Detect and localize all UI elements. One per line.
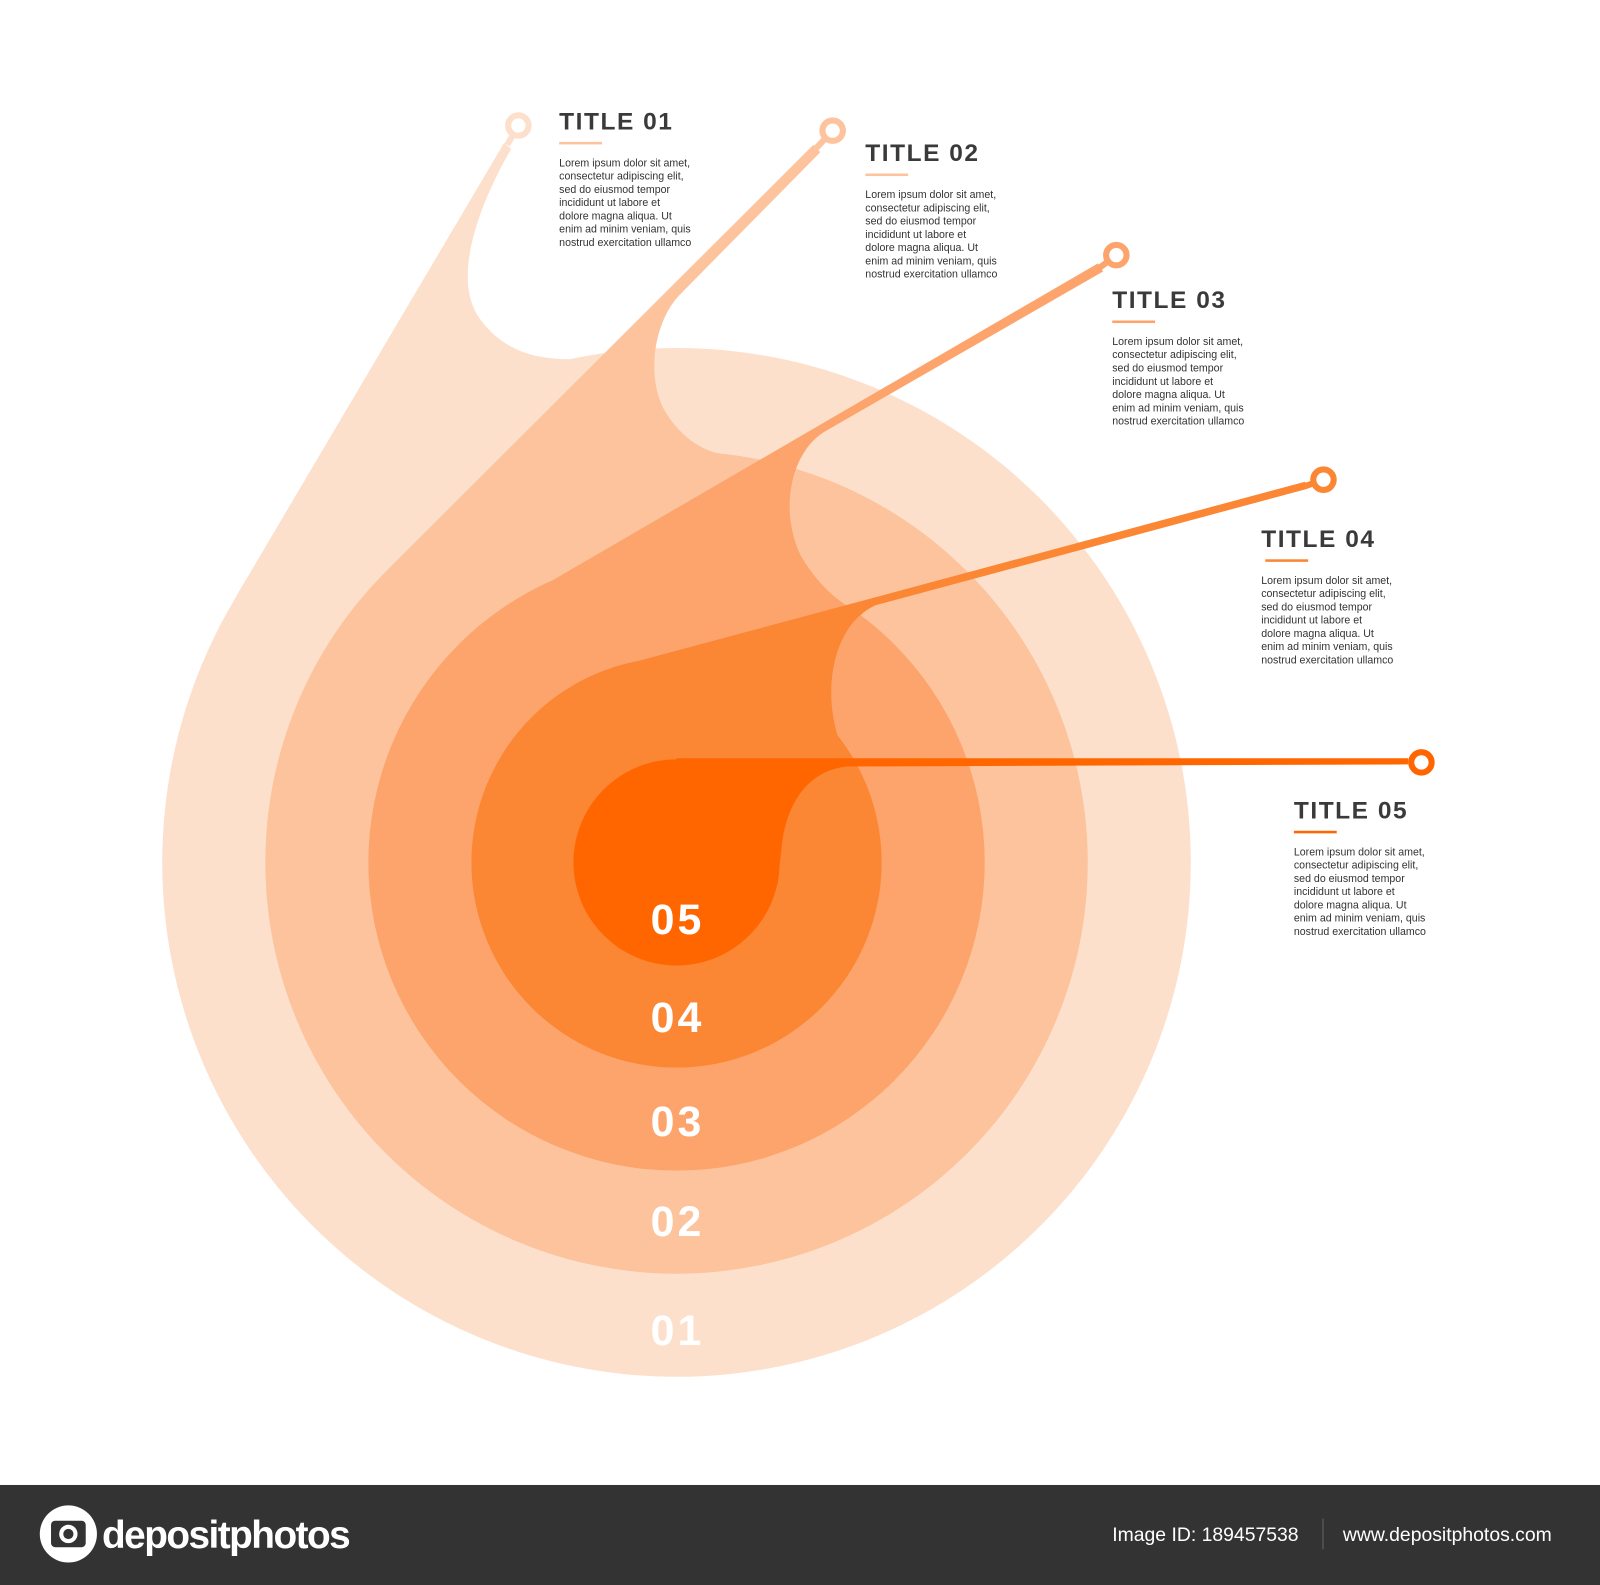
drop 03 xyxy=(368,245,1127,1171)
text block 02: TITLE 02 xyxy=(865,140,980,167)
text block 02: dolore magna aliqua. Ut xyxy=(865,242,978,254)
text block 02: nostrud exercitation ullamco xyxy=(865,269,997,281)
drop 04 xyxy=(471,469,1334,1068)
numbers: 03 xyxy=(651,1098,704,1146)
text block 02 xyxy=(865,140,997,281)
numbers: 01 xyxy=(651,1307,704,1355)
text block 04: TITLE 04 xyxy=(1261,526,1376,553)
text block 04: Lorem ipsum dolor sit amet, xyxy=(1261,575,1392,587)
numbers: 05 xyxy=(651,896,704,944)
text block 03: sed do eiusmod tempor xyxy=(1112,362,1224,375)
text block 04: consectetur adipiscing elit, xyxy=(1261,588,1386,600)
text block 04: incididunt ut labore et xyxy=(1261,615,1362,627)
text block 05: dolore magna aliqua. Ut xyxy=(1294,899,1407,911)
footer bar xyxy=(0,1485,1600,1585)
text block 05: enim ad minim veniam, quis xyxy=(1294,913,1425,925)
text block 03: dolore magna aliqua. Ut xyxy=(1112,389,1225,401)
footer bar: depositphotos xyxy=(102,1514,349,1557)
text block 03: nostrud exercitation ullamco xyxy=(1112,416,1244,428)
text block 04: enim ad minim veniam, quis xyxy=(1261,641,1393,653)
text block 03: TITLE 03 xyxy=(1112,287,1227,314)
drop 01 xyxy=(162,115,1191,1377)
drop 02 xyxy=(265,120,1088,1274)
text block 01: dolore magna aliqua. Ut xyxy=(559,210,672,222)
text block 04: dolore magna aliqua. Ut xyxy=(1261,628,1374,640)
text block 01 xyxy=(559,109,691,249)
drop 05 xyxy=(573,752,1432,965)
text block 02: enim ad minim veniam, quis xyxy=(865,255,997,267)
footer bar: www.depositphotos.com xyxy=(1342,1524,1552,1546)
text block 05: sed do eiusmod tempor xyxy=(1294,873,1405,885)
text block 02: sed do eiusmod tempor xyxy=(865,216,977,228)
text block 05: Lorem ipsum dolor sit amet, xyxy=(1294,846,1425,858)
text block 01: Lorem ipsum dolor sit amet, xyxy=(559,157,690,169)
text block 02: consectetur adipiscing elit, xyxy=(865,202,990,214)
text block 03: enim ad minim veniam, quis xyxy=(1112,402,1244,414)
text block 01: incididunt ut labore et xyxy=(559,197,660,209)
text block 01: nostrud exercitation ullamco xyxy=(559,237,691,249)
text block 01: sed do eiusmod tempor xyxy=(559,184,671,196)
text block 02: incididunt ut labore et xyxy=(865,229,966,241)
text block 01: TITLE 01 xyxy=(559,109,673,136)
footer bar: Image ID: 189457538 xyxy=(1112,1524,1299,1546)
numbers: 04 xyxy=(651,994,704,1042)
text block 04: nostrud exercitation ullamco xyxy=(1261,654,1393,666)
text block 05: nostrud exercitation ullamco xyxy=(1294,926,1426,938)
text block 02: Lorem ipsum dolor sit amet, xyxy=(865,189,996,201)
text block 03 xyxy=(1112,287,1244,428)
text block 05: TITLE 05 xyxy=(1294,798,1408,825)
text block 04 xyxy=(1261,526,1393,666)
text block 04: sed do eiusmod tempor xyxy=(1261,601,1373,613)
numbers xyxy=(651,896,704,1355)
text block 03: Lorem ipsum dolor sit amet, xyxy=(1112,336,1243,348)
numbers: 02 xyxy=(651,1198,704,1246)
text block 03: incididunt ut labore et xyxy=(1112,376,1213,388)
icon: logo camera xyxy=(40,1505,97,1563)
text block 01: enim ad minim veniam, quis xyxy=(559,224,691,236)
text block 03: consectetur adipiscing elit, xyxy=(1112,349,1237,361)
text block 05: incididunt ut labore et xyxy=(1294,886,1395,898)
text block 05 xyxy=(1294,798,1426,938)
text block 05: consectetur adipiscing elit, xyxy=(1294,860,1418,872)
text block 01: consectetur adipiscing elit, xyxy=(559,171,684,183)
